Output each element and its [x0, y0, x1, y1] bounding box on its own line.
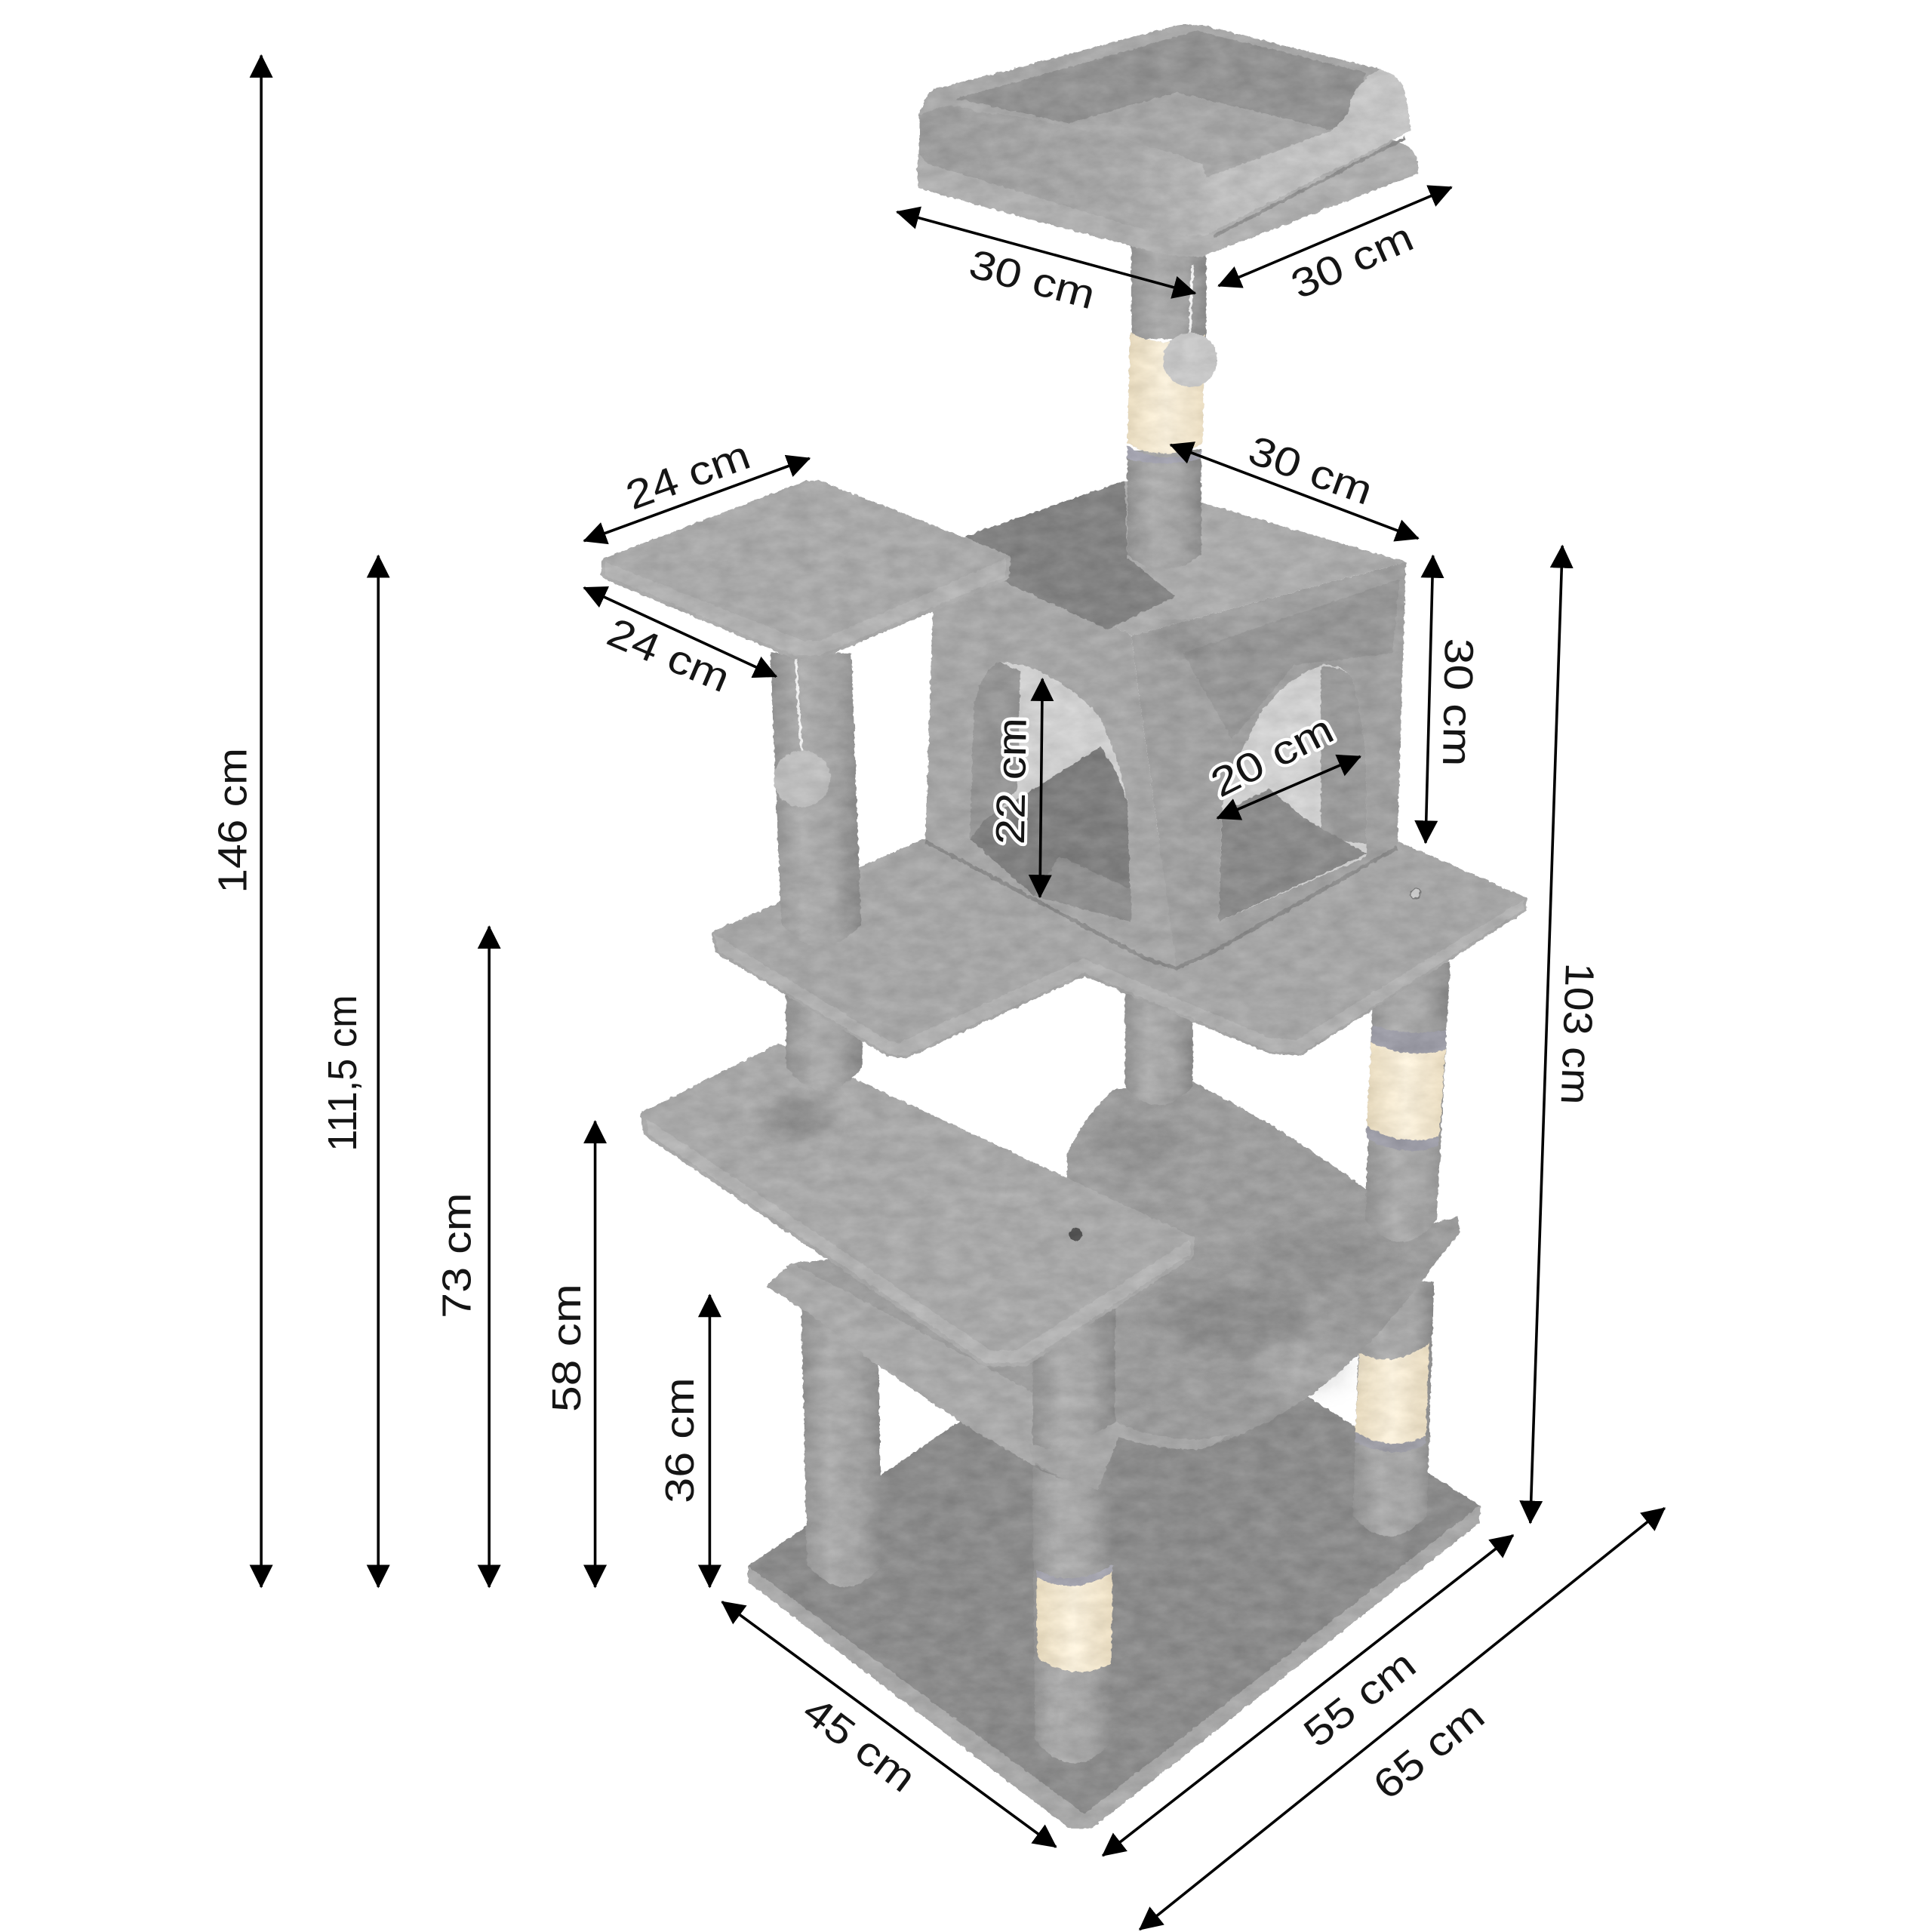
dimension arrow: house top 30 cm [1171, 445, 1418, 538]
dimension arrow: 58 cm [594, 1121, 596, 1587]
dimension arrow: bed depth 30 cm left [897, 212, 1195, 294]
bed cushion body [919, 24, 1411, 235]
dimension label: 146 cm: 146 cm [211, 748, 256, 894]
top post with sisal band [1128, 234, 1206, 569]
dimension label: small shelf 24 cm lower: 24 cm [601, 610, 737, 701]
lower shelf [645, 1048, 1190, 1363]
dimension label: base 45 cm: 45 cm [795, 1687, 924, 1801]
dimension arrow: small shelf 24 cm lower [584, 588, 777, 676]
dimension arrow: small shelf 24 cm top [584, 458, 810, 541]
right arch opening [1219, 664, 1367, 921]
dimension label: arch height 22 cm: 22 cm [988, 718, 1035, 845]
hammock [767, 1081, 1460, 1490]
dimension label: 111,5 cm: 111,5 cm [320, 995, 365, 1152]
top pom-pom toy [1163, 333, 1217, 387]
upper right post with sisal band [1365, 961, 1451, 1242]
dimension arrow: 73 cm [488, 927, 490, 1587]
bed front bolsters [919, 69, 1411, 235]
front post with sisal band [1032, 1454, 1112, 1763]
post under the small shelf [770, 653, 861, 946]
left arch opening [970, 662, 1131, 921]
dimension arrow: 146 cm [260, 55, 262, 1587]
bed base plate [917, 123, 1418, 257]
dimension label: house top 30 cm: 30 cm [1243, 427, 1379, 514]
bed seat [1069, 92, 1334, 174]
bed slit shadow [1214, 138, 1404, 236]
dimension label: base 55 cm: 55 cm [1295, 1641, 1424, 1756]
lower back-left post [801, 1294, 882, 1587]
front post upper segment [1032, 1294, 1115, 1466]
center post [1125, 974, 1192, 1105]
dimension label: house height 30 cm: 30 cm [1434, 638, 1481, 767]
dimension label: total 65 cm: 65 cm [1364, 1693, 1493, 1808]
left pom-pom toy [774, 659, 830, 807]
bed inner back walls [956, 31, 1367, 131]
dimension arrow: total 65 cm [1140, 1508, 1665, 1930]
dimension arrow: base 55 cm [1103, 1535, 1513, 1856]
dimension arrow: arch height 22 cm [1040, 679, 1042, 897]
top bed perch [917, 24, 1418, 257]
dimension arrow: house height 30 cm [1426, 555, 1433, 843]
dimension label: 73 cm: 73 cm [435, 1192, 480, 1318]
dimension arrow: 36 cm [709, 1295, 711, 1587]
dimension label: 58 cm: 58 cm [544, 1284, 589, 1412]
cat tree product illustration [605, 24, 1524, 1829]
base platform [748, 1294, 1480, 1829]
dimension arrow: 111,5 cm [377, 555, 379, 1587]
house box [925, 481, 1406, 968]
dimension arrow: bed depth 30 cm right [1219, 187, 1451, 286]
dimension label: small shelf 24 cm top: 24 cm [620, 432, 756, 518]
dimension label: bed 30 cm left: 30 cm [964, 242, 1100, 318]
small top-left shelf [605, 485, 1007, 656]
hammock front corner [1029, 1422, 1232, 1490]
middle L-shaped shelf [713, 841, 1524, 1056]
hammock left lip [767, 1263, 1035, 1466]
dimension label: 103 cm: 103 cm [1552, 962, 1602, 1106]
lower back-right post with sisal band [1353, 1281, 1434, 1537]
dimension arrow: base 45 cm [722, 1601, 1056, 1847]
dimension arrow: 103 cm [1531, 546, 1562, 1523]
hammock shading [1098, 1112, 1380, 1395]
dimension label: arch width 20 cm: 20 cm [1204, 706, 1340, 806]
dimension label: 36 cm: 36 cm [657, 1377, 703, 1503]
upper left support post [786, 974, 863, 1091]
dimension label: bed 30 cm right: 30 cm [1284, 214, 1420, 308]
dimension arrow: arch width 20 cm [1217, 756, 1360, 818]
